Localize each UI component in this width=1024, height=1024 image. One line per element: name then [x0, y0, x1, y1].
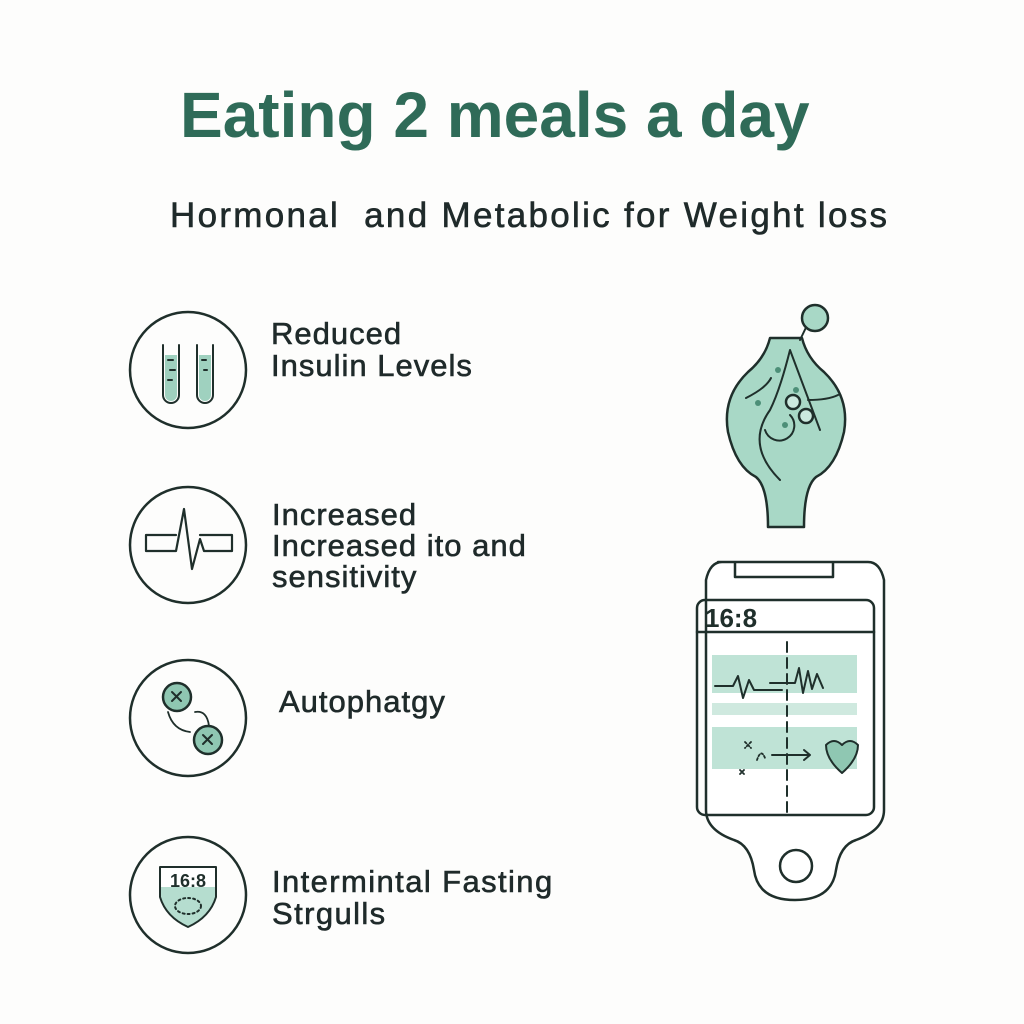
illustration: 16:8 device: 16:8	[705, 603, 757, 633]
subtitle: Hormonal and Metabolic for Weight loss	[170, 196, 889, 235]
icon: test tubes	[130, 312, 246, 428]
label: sensitivity: sensitivity	[272, 559, 417, 594]
illustration: 16:8 device	[697, 562, 884, 900]
label: sensitivity: Increased	[272, 497, 417, 532]
label: sensitivity	[272, 497, 527, 594]
icon: shield 16:8	[130, 837, 246, 953]
label: insulin: Insulin Levels	[271, 348, 473, 383]
label: insulin	[271, 316, 473, 383]
title: Eating 2 meals a day	[180, 79, 810, 151]
label: insulin: Reduced	[271, 316, 402, 351]
label: fasting	[272, 864, 554, 931]
illustration: organ vase	[727, 305, 845, 527]
label: sensitivity: Increased ito and	[272, 528, 527, 563]
icon: shield 16:8: 16:8	[170, 871, 206, 891]
icon: autophagy cells	[130, 660, 246, 776]
label: autophagy: Autophatgy	[279, 684, 446, 719]
label: fasting: Strgulls	[272, 896, 387, 931]
label: fasting: Intermintal Fasting	[272, 864, 554, 899]
icon: pulse	[130, 487, 246, 603]
